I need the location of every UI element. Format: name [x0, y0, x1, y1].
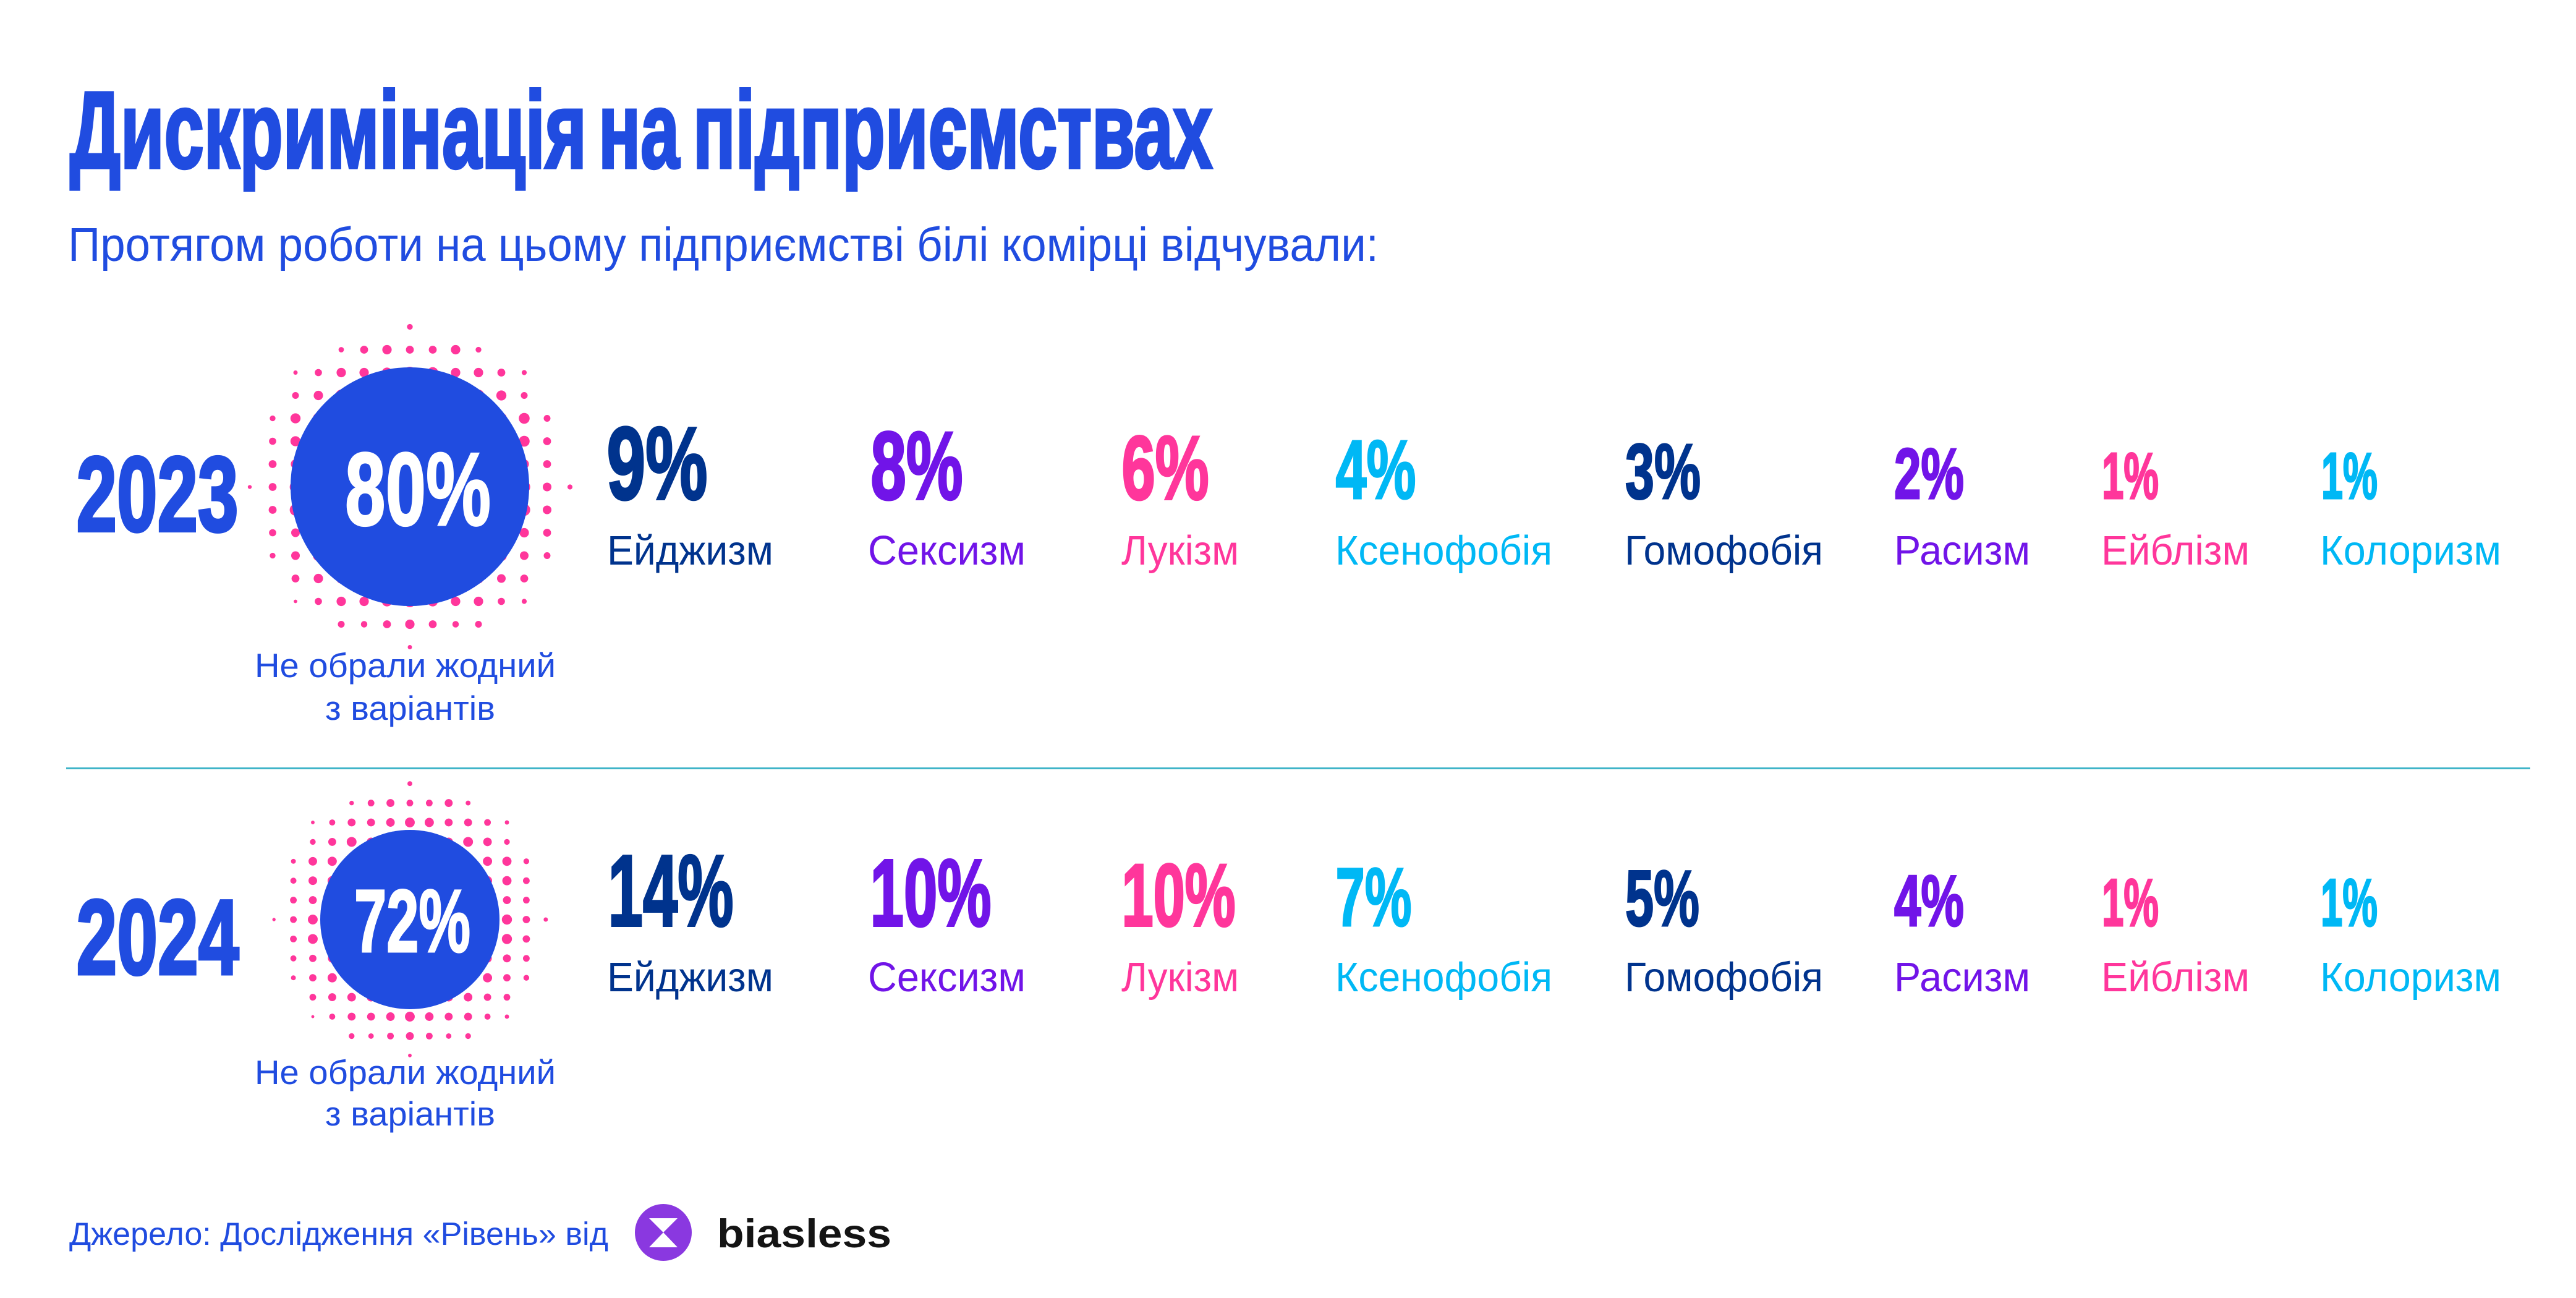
caption 2023: Не обрали жодний — [255, 646, 556, 685]
stat: Сексизм 10% — [868, 840, 1026, 1001]
stat: Сексизм 8% — [868, 412, 1026, 574]
logo wordmark: biasless — [717, 1211, 891, 1256]
stat: Ейджизм 14% — [607, 834, 773, 1001]
stat: Гомофобія 5% — [1625, 855, 1823, 1001]
title: на — [598, 70, 680, 191]
icon: halftone dots 2024 — [273, 782, 547, 1057]
stat: Ейблізм 1%: Ейблізм — [2101, 954, 2250, 1001]
stat: Колоризм 1%: Колоризм — [2320, 527, 2501, 574]
circle: 72% none selected — [320, 830, 499, 1009]
stat: Сексизм 10%: Сексизм — [868, 954, 1026, 1001]
stat: Расизм 2%: 2% — [1894, 433, 1964, 514]
stat: Колоризм 1%: 1% — [2321, 865, 2378, 941]
stat: Гомофобія 3% — [1625, 428, 1823, 574]
caption 2023 — [255, 646, 556, 727]
stat: Колоризм 1%: 1% — [2321, 440, 2378, 513]
subtitle: Протягом роботи на цьому підприємстві білі комірці відчували: — [68, 218, 1379, 271]
stat: Гомофобія 5%: 5% — [1625, 855, 1699, 943]
stat: Гомофобія 5%: Гомофобія — [1625, 954, 1823, 1001]
panel: 2024 row — [77, 782, 2501, 1133]
stat: Ейджизм 14%: 14% — [608, 834, 733, 947]
stat: Ейблізм 1% — [2101, 865, 2250, 1001]
stat: Ейблізм 1%: 1% — [2102, 865, 2159, 941]
panel: 2023 row — [77, 325, 2501, 727]
stat: Колоризм 1% — [2320, 865, 2501, 1001]
stat: Лукізм 10%: 10% — [1121, 847, 1235, 945]
stat: Колоризм 1% — [2320, 440, 2501, 574]
icon: biasless logo — [635, 1204, 692, 1261]
stat: Ейблізм 1%: Ейблізм — [2101, 527, 2250, 574]
stat: Колоризм 1%: Колоризм — [2320, 954, 2501, 1001]
title — [70, 70, 1212, 191]
stat: Ейджизм 9%: 9% — [607, 406, 707, 521]
stat: Лукізм 6%: 6% — [1121, 417, 1209, 518]
icon: halftone dots 2023 — [249, 325, 572, 649]
stat: Лукізм 6%: Лукізм — [1121, 527, 1239, 574]
stat: Гомофобія 3%: Гомофобія — [1625, 527, 1823, 574]
stat: Лукізм 10%: Лукізм — [1121, 954, 1239, 1001]
stat: Лукізм 10% — [1121, 847, 1239, 1001]
stat: Ксенофобія 7% — [1335, 852, 1552, 1001]
stat: Сексизм 8%: Сексизм — [868, 527, 1026, 574]
circle: 80% none selected — [291, 367, 529, 606]
title: Дискримінація — [70, 70, 587, 191]
caption 2024: Не обрали жодний — [255, 1053, 556, 1091]
stat: Ксенофобія 7%: Ксенофобія — [1335, 954, 1552, 1001]
stat: Ейблізм 1% — [2101, 440, 2250, 574]
stat: Ксенофобія 4% — [1335, 423, 1552, 574]
stat: Ейблізм 1%: 1% — [2102, 440, 2159, 513]
caption 2024: з варіантів — [325, 1095, 495, 1133]
source text: Джерело: Дослідження «Рівень» від — [69, 1216, 608, 1252]
stat: Ксенофобія 4%: 4% — [1335, 423, 1416, 516]
stat: Ейджизм 14%: Ейджизм — [607, 954, 773, 1001]
stat: Расизм 2%: Расизм — [1894, 527, 2030, 574]
stat: Сексизм 10%: 10% — [870, 840, 992, 946]
stat: Лукізм 6% — [1121, 417, 1239, 574]
caption 2024 — [255, 1053, 556, 1133]
circle: 80% none selected: 80% — [345, 431, 491, 547]
stat: Гомофобія 3%: 3% — [1625, 428, 1701, 515]
stat: Ейджизм 9%: Ейджизм — [607, 527, 773, 574]
stat: Расизм 4%: Расизм — [1894, 954, 2030, 1001]
stat: Ейджизм 9% — [607, 406, 773, 574]
caption 2023: з варіантів — [325, 689, 495, 727]
circle: 72% none selected: 72% — [354, 871, 470, 971]
year 2024: 2024 — [77, 878, 239, 997]
stat: Расизм 4%: 4% — [1894, 860, 1964, 941]
stat: Расизм 4% — [1894, 860, 2030, 1001]
stat: Сексизм 8%: 8% — [870, 412, 963, 520]
year 2023: 2023 — [77, 435, 239, 554]
stat: Расизм 2% — [1894, 433, 2030, 574]
stat: Ксенофобія 4%: Ксенофобія — [1335, 527, 1552, 574]
title: підприємствах — [693, 70, 1212, 191]
stat: Ксенофобія 7%: 7% — [1335, 852, 1412, 944]
